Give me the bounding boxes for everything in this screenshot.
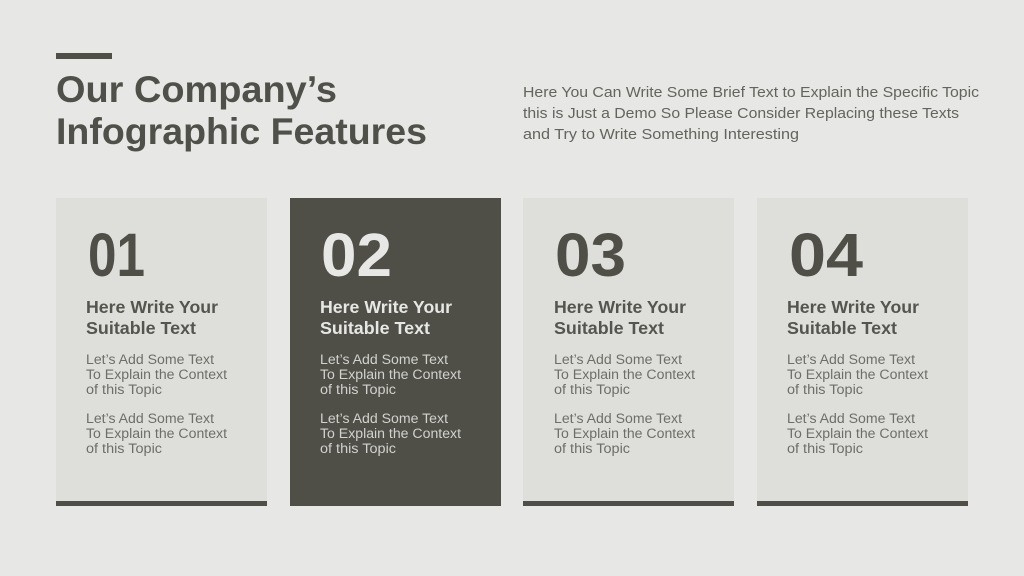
card 04 body text: To Explain the Context	[787, 367, 928, 382]
number 01: 01	[88, 221, 145, 289]
card 04 heading: Here Write Your	[787, 297, 919, 317]
card 01 body text: Let’s Add Some Text	[86, 411, 214, 426]
card 01 heading: Here Write Your	[86, 297, 218, 317]
card 03 body text: Let’s Add Some Text	[554, 411, 682, 426]
card 02 body text: To Explain the Context	[320, 426, 461, 441]
card 01 body text: To Explain the Context	[86, 367, 227, 382]
card 02 body text: of this Topic	[320, 382, 396, 397]
card 03 body text: of this Topic	[554, 382, 630, 397]
card 02 body text: Let’s Add Some Text	[320, 411, 448, 426]
card 01 heading: Suitable Text	[86, 318, 196, 338]
panel: card 01	[56, 198, 267, 506]
card 03 body text: To Explain the Context	[554, 367, 695, 382]
number 04: 04	[789, 221, 863, 289]
number 02: 02	[321, 221, 392, 289]
card 02 body text: of this Topic	[320, 441, 396, 456]
card 02 body text: Let’s Add Some Text	[320, 352, 448, 367]
card 04 body text: Let’s Add Some Text	[787, 411, 915, 426]
card 03 heading	[554, 297, 686, 338]
card 04 body text: To Explain the Context	[787, 426, 928, 441]
card 04 body text: of this Topic	[787, 382, 863, 397]
card 04 heading	[787, 297, 919, 338]
card 04 heading: Suitable Text	[787, 318, 897, 338]
intro text block: this is Just a Demo So Please Consider Replacing these Texts	[523, 105, 959, 122]
panel: card 02 highlighted	[290, 198, 501, 506]
panel: card 04	[757, 198, 968, 506]
card 03 body text: Let’s Add Some Text	[554, 352, 682, 367]
card 01 body text: To Explain the Context	[86, 426, 227, 441]
card 02 body text	[320, 352, 461, 456]
card 04 body text: Let’s Add Some Text	[787, 352, 915, 367]
card 03 heading: Here Write Your	[554, 297, 686, 317]
card 02 heading	[320, 297, 452, 338]
card 04 body text	[787, 352, 928, 456]
card 01 heading	[86, 297, 218, 338]
card 02 heading: Here Write Your	[320, 297, 452, 317]
title: Our Company’s	[56, 69, 337, 110]
card 02 body text: To Explain the Context	[320, 367, 461, 382]
title accent bar	[56, 53, 112, 59]
card 04 body text: of this Topic	[787, 441, 863, 456]
card 01 body text	[86, 352, 227, 456]
card 01 body text: Let’s Add Some Text	[86, 352, 214, 367]
title: Infographic Features	[56, 111, 427, 152]
panel: card 03	[523, 198, 734, 506]
card 02 heading: Suitable Text	[320, 318, 430, 338]
number 03: 03	[555, 221, 626, 289]
intro text block	[523, 84, 980, 143]
card 01 body text: of this Topic	[86, 382, 162, 397]
title	[56, 69, 427, 152]
card 03 body text: of this Topic	[554, 441, 630, 456]
card 03 body text: To Explain the Context	[554, 426, 695, 441]
intro text block: and Try to Write Something Interesting	[523, 126, 799, 143]
card 03 body text	[554, 352, 695, 456]
intro text block: Here You Can Write Some Brief Text to Explain the Specific Topic	[523, 84, 980, 101]
card 01 body text: of this Topic	[86, 441, 162, 456]
card 03 heading: Suitable Text	[554, 318, 664, 338]
